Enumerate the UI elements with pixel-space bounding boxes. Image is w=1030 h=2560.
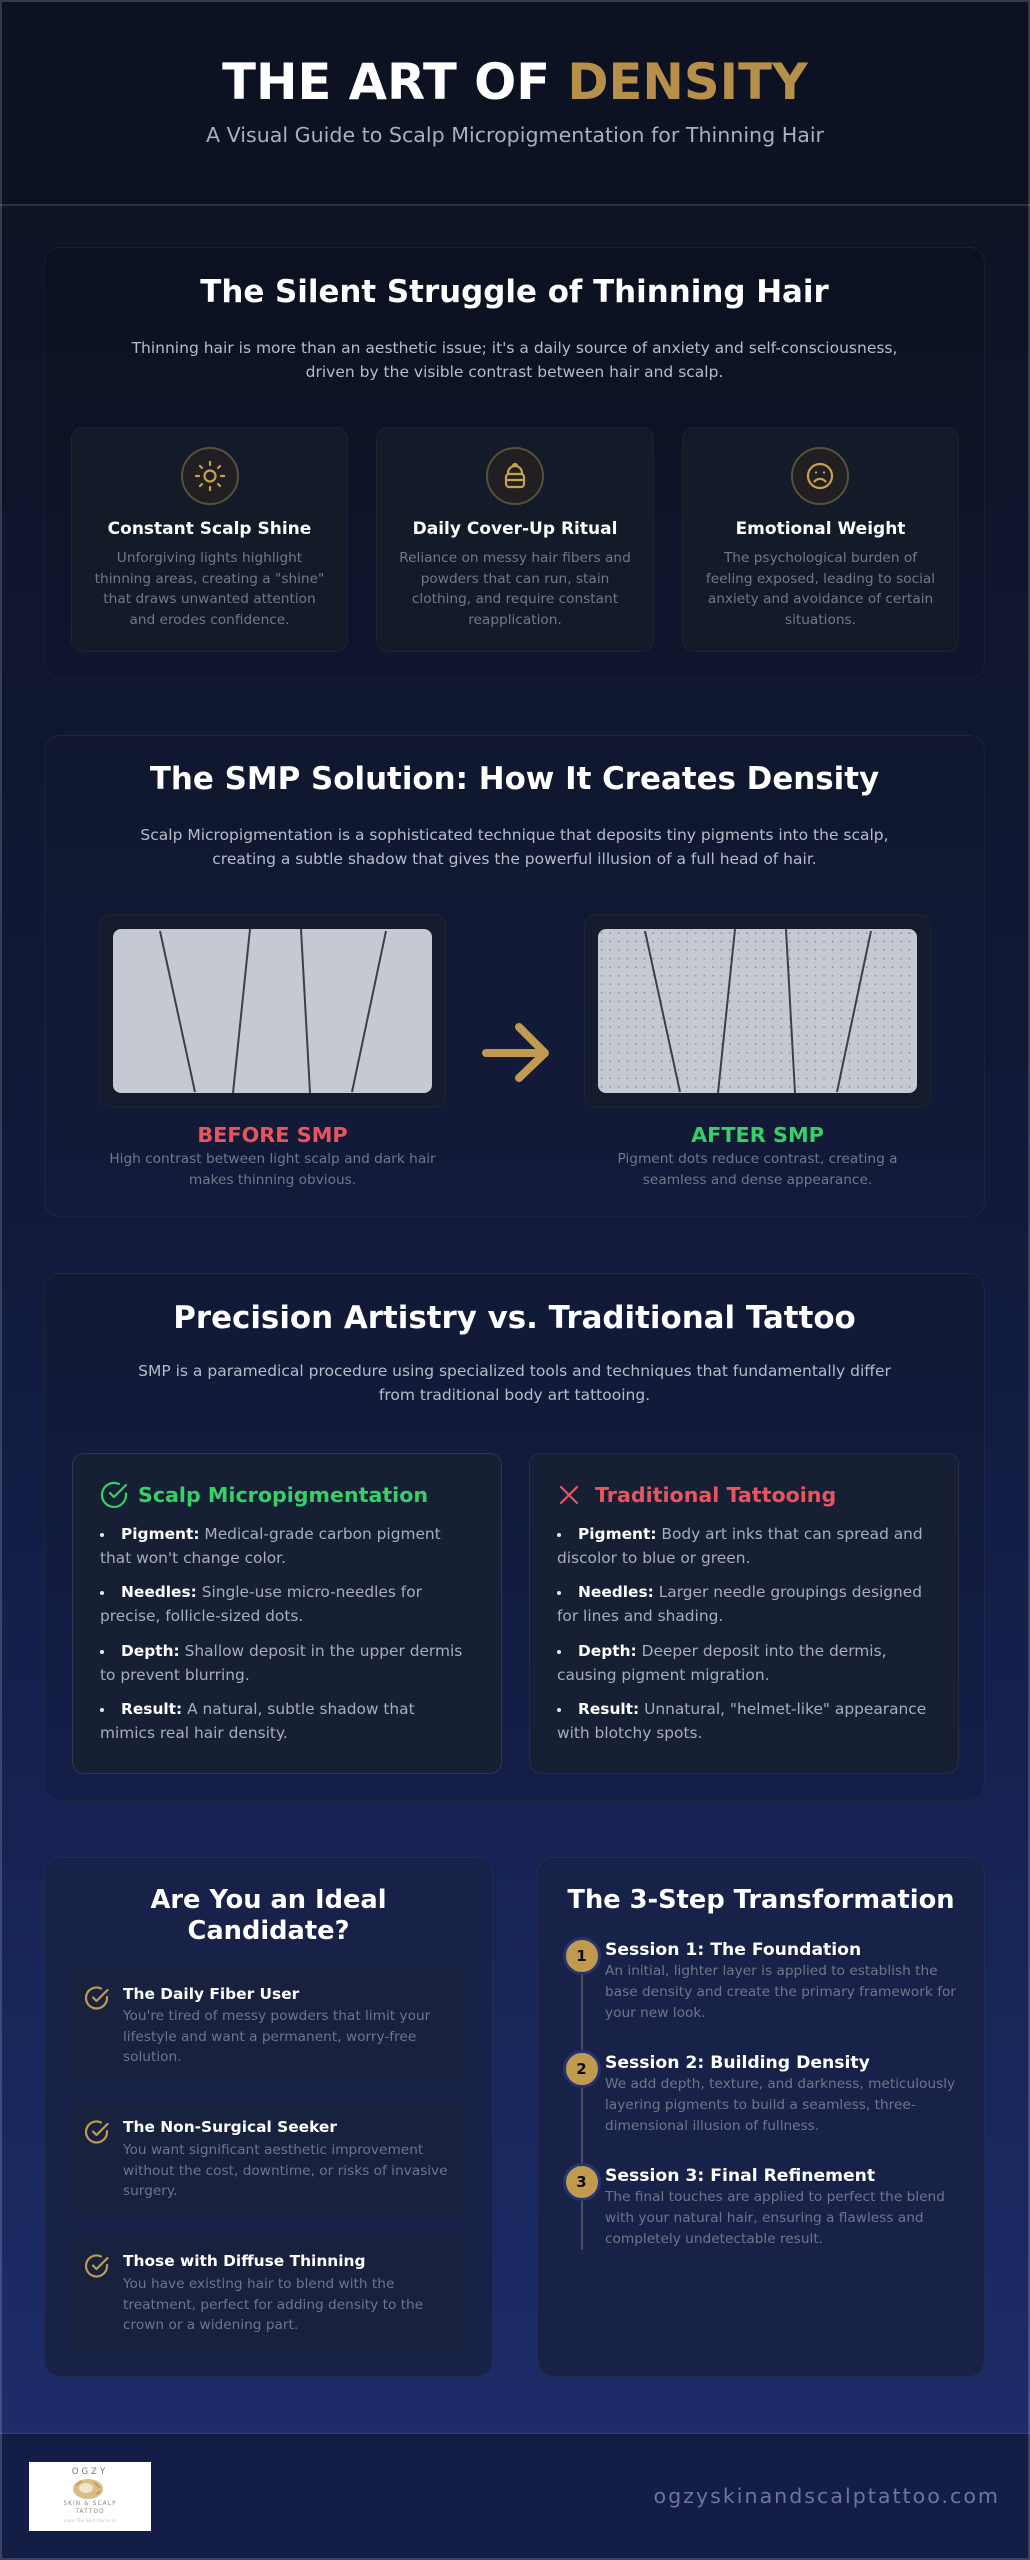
icon: red x	[560, 1486, 578, 1504]
result item: with blotchy spots.	[557, 1724, 702, 1742]
card text: Unforgiving lights highlight	[117, 550, 302, 566]
step 3 number	[562, 2163, 600, 2201]
icon: check	[85, 2120, 109, 2144]
panel: ideal candidate	[44, 1857, 493, 2377]
logo subtitle	[63, 2500, 117, 2514]
card text: reapplication.	[468, 612, 562, 628]
intro text: SMP	[140, 826, 889, 868]
pigment item: that won't change color.	[100, 1549, 286, 1567]
candidate text	[123, 2142, 448, 2199]
after description: seamless and dense appearance.	[643, 1172, 872, 1188]
card text: that draws unwanted attention	[103, 591, 316, 607]
heading: ideal candidate: Candidate?	[188, 1916, 350, 1946]
logo tagline: Love The Skin You're In	[64, 2519, 116, 2524]
candidate text: You're tired of messy powders that limit your	[123, 2008, 430, 2024]
before illustration	[99, 914, 446, 1108]
pigment item	[557, 1525, 923, 1567]
candidate text: solution.	[123, 2049, 182, 2065]
depth item: Depth: Deeper deposit into the dermis,	[578, 1642, 886, 1660]
icon: sad face	[791, 447, 849, 505]
needles item	[100, 1583, 422, 1625]
before description: High contrast between light scalp and dark hair	[109, 1151, 436, 1167]
step 3 text: with your natural hair, ensuring a flawless and	[605, 2210, 924, 2226]
step 3 text	[605, 2189, 945, 2247]
arrow	[482, 1023, 549, 1082]
needles item: Needles: Larger needle groupings designed	[578, 1583, 922, 1601]
after description: Pigment dots reduce contrast, creating a	[618, 1151, 898, 1167]
depth item: causing pigment migration.	[557, 1666, 770, 1684]
needles item: precise, follicle-sized dots.	[100, 1607, 303, 1625]
heading: the silent struggle: The Silent Struggle of Thinning Hair	[200, 274, 829, 310]
candidate text	[123, 2276, 423, 2333]
SMP list	[100, 1525, 462, 1742]
logo name: OGZY	[72, 2467, 108, 2477]
card title: Emotional Weight	[736, 519, 905, 539]
icon: sun	[181, 447, 239, 505]
icon: green check	[100, 1482, 128, 1508]
card: daily cover-up ritual	[376, 427, 654, 652]
step 1 text: base density and create the primary framework for	[605, 1984, 956, 2000]
panel: 3-step transformation	[537, 1857, 985, 2377]
card title: Daily Cover-Up Ritual	[413, 519, 617, 539]
result item	[557, 1700, 926, 1742]
step 1 number	[562, 1937, 600, 1975]
card: emotional weight	[682, 427, 959, 652]
result item: mimics real hair density.	[100, 1724, 288, 1742]
step 3 title: Session 3: Final Refinement	[605, 2166, 875, 2186]
result item: Result: Unnatural, "helmet-like" appearance	[578, 1700, 926, 1718]
step 1 text: An initial, lighter layer is applied to establish the	[605, 1963, 938, 1979]
card text: clothing, and require constant	[412, 591, 618, 607]
card text: situations.	[785, 612, 856, 628]
intro text: struggle: Thinning hair is more than an aesthetic issue; it's a daily source of anxiety and self-consciousness,	[132, 339, 897, 357]
intro text: precision: from traditional body art tattooing.	[379, 1386, 650, 1404]
before description	[109, 1151, 436, 1188]
logo emblem	[73, 2479, 103, 2499]
candidate text	[123, 2008, 430, 2065]
step 3 number: 3	[576, 2173, 587, 2191]
card text: The psychological burden of	[724, 550, 917, 566]
candidate text: treatment, perfect for adding density to the	[123, 2297, 423, 2313]
card text	[706, 550, 935, 628]
website: ogzyskinandscalptattoo.com	[653, 2484, 1000, 2508]
depth item	[557, 1642, 886, 1684]
pigment item: Pigment: Body art inks that can spread and	[578, 1525, 923, 1543]
candidate text: crown or a widening part.	[123, 2317, 298, 2333]
depth item	[100, 1642, 462, 1684]
icon: check	[85, 2254, 109, 2278]
card text	[95, 550, 324, 628]
card text: and erodes confidence.	[129, 612, 290, 628]
after illustration	[584, 914, 931, 1108]
before label: BEFORE SMP	[197, 1123, 348, 1147]
before description: makes thinning obvious.	[189, 1172, 356, 1188]
candidate: daily fiber user	[72, 1967, 466, 2082]
step 1 text: your new look.	[605, 2005, 706, 2021]
intro text: struggle	[132, 339, 897, 381]
card text	[399, 550, 631, 628]
candidate text: lifestyle and want a permanent, worry-free	[123, 2029, 416, 2045]
title: THE ART OF DENSITY	[222, 53, 808, 111]
step 2 text: We add depth, texture, and darkness, meticulously	[605, 2076, 955, 2092]
candidate text: You have existing hair to blend with the	[123, 2276, 394, 2292]
step 2 text: layering pigments to build a seamless, three-	[605, 2097, 916, 2113]
icon: bag	[486, 447, 544, 505]
candidate title: The Non-Surgical Seeker	[123, 2118, 337, 2136]
card text: feeling exposed, leading to social	[706, 571, 935, 587]
depth item: to prevent blurring.	[100, 1666, 250, 1684]
comparison card: tattoo	[529, 1453, 959, 1774]
step 2 number: 2	[576, 2060, 587, 2078]
card text: thinning areas, creating a "shine"	[95, 571, 324, 587]
comparison heading: Scalp Micropigmentation	[138, 1483, 428, 1507]
logo subtitle: SKIN & SCALP	[63, 2501, 117, 2507]
tattoo list	[557, 1525, 926, 1742]
footer band	[0, 2433, 1030, 2560]
step 2 text	[605, 2076, 955, 2134]
needles item: for lines and shading.	[557, 1607, 723, 1625]
candidate text: without the cost, downtime, or risks of invasive	[123, 2163, 448, 2179]
candidate text: surgery.	[123, 2183, 177, 2199]
heading: 3-step transformation: The 3-Step Transformation	[567, 1885, 955, 1915]
panel: precision artistry	[44, 1273, 985, 1801]
card text: anxiety and avoidance of certain	[708, 591, 933, 607]
pigment item: Pigment: Medical-grade carbon pigment	[121, 1525, 441, 1543]
card text: powders that can run, stain	[421, 571, 609, 587]
pigment item	[100, 1525, 441, 1567]
comparison heading: Traditional Tattooing	[595, 1483, 836, 1507]
timeline line	[581, 1974, 583, 2250]
card text: Reliance on messy hair fibers and	[399, 550, 631, 566]
subtitle: A Visual Guide to Scalp Micropigmentation for Thinning Hair	[206, 123, 824, 147]
needles item	[557, 1583, 922, 1625]
header band	[0, 0, 1030, 206]
candidate: non-surgical seeker	[72, 2102, 466, 2217]
result item	[100, 1700, 415, 1742]
step 3 text: The final touches are applied to perfect the blend	[605, 2189, 945, 2205]
heading: SMP solution: The SMP Solution: How It Creates Density	[150, 761, 879, 797]
result item: Result: A natural, subtle shadow that	[121, 1700, 415, 1718]
step 2 text: dimensional illusion of fullness.	[605, 2118, 819, 2134]
card: constant scalp shine	[71, 427, 348, 652]
comparison card: SMP	[72, 1453, 502, 1774]
candidate text: You want significant aesthetic improvement	[123, 2142, 423, 2158]
icon: check	[85, 1986, 109, 2010]
needles item: Needles: Single-use micro-needles for	[121, 1583, 422, 1601]
after label: AFTER SMP	[691, 1123, 824, 1147]
heading: precision artistry: Precision Artistry vs. Traditional Tattoo	[173, 1300, 856, 1336]
after description	[618, 1151, 898, 1188]
heading: ideal candidate: Are You an Ideal	[150, 1885, 387, 1915]
intro text: SMP: creating a subtle shadow that gives the powerful illusion of a full head of hair.	[212, 850, 817, 868]
card title: Constant Scalp Shine	[108, 519, 311, 539]
logo subtitle: TATTOO	[75, 2508, 105, 2514]
panel: the SMP solution	[44, 735, 985, 1217]
panel: the silent struggle	[44, 247, 985, 679]
step 3 text: completely undetectable result.	[605, 2231, 823, 2247]
pigment item: discolor to blue or green.	[557, 1549, 750, 1567]
step 2 number	[562, 2050, 600, 2088]
heading: ideal candidate	[150, 1885, 387, 1946]
logo	[29, 2462, 151, 2531]
intro text: struggle: driven by the visible contrast between hair and scalp.	[306, 363, 723, 381]
step 1 title: Session 1: The Foundation	[605, 1940, 861, 1960]
intro text: SMP: Scalp Micropigmentation is a sophisticated technique that deposits tiny pigments into the scalp,	[140, 826, 889, 844]
step 2 title: Session 2: Building Density	[605, 2053, 870, 2073]
step 1 number: 1	[576, 1947, 587, 1965]
intro text: precision	[138, 1362, 891, 1404]
candidate title: The Daily Fiber User	[123, 1985, 299, 2003]
depth item: Depth: Shallow deposit in the upper dermis	[121, 1642, 462, 1660]
candidate title: Those with Diffuse Thinning	[123, 2252, 365, 2270]
intro text: precision: SMP is a paramedical procedure using specialized tools and techniques that fundamentally differ	[138, 1362, 891, 1380]
candidate: diffuse thinning	[72, 2236, 466, 2351]
step 1 text	[605, 1963, 956, 2021]
